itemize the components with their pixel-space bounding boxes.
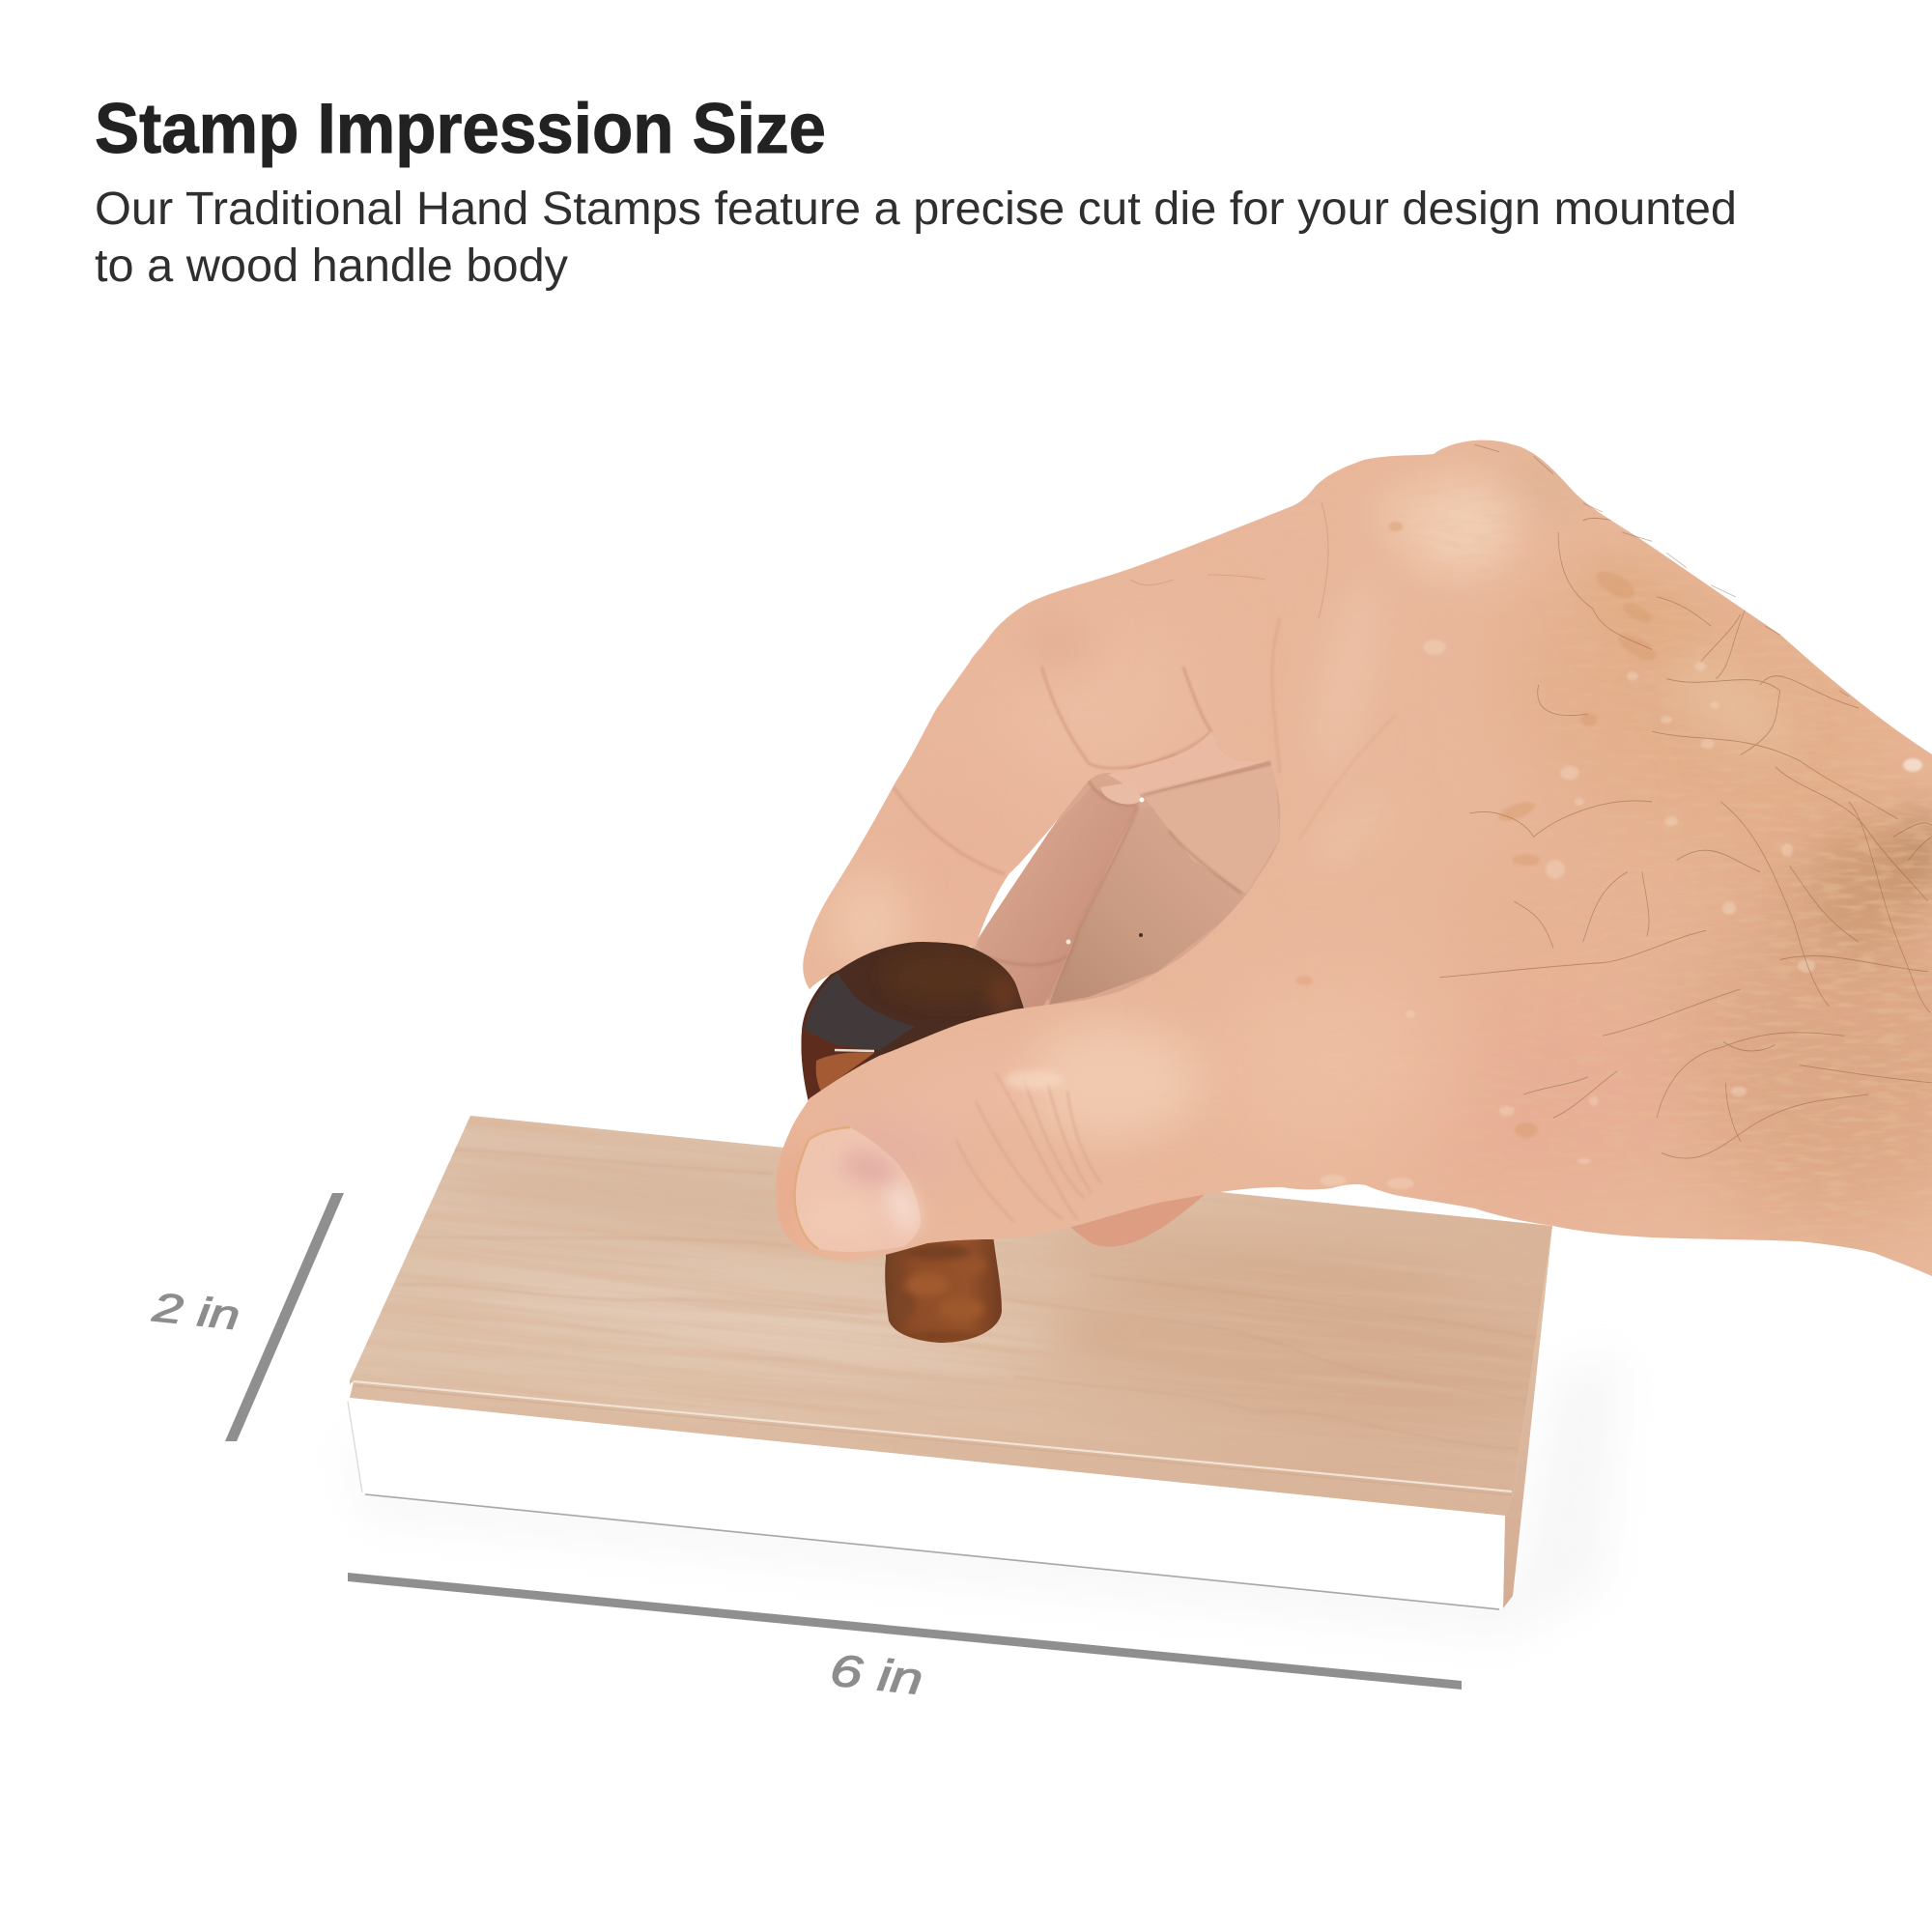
stamp handle knob: [802, 942, 1024, 1101]
thumb knuckle wrinkles: [956, 1072, 1101, 1222]
wood grain: [350, 1116, 1552, 1507]
front lip of wood: [350, 1383, 1135, 1478]
dimension line: 2 in: [225, 1193, 344, 1441]
clear plastic highlight line: [354, 1381, 1512, 1492]
skin texture: [1716, 798, 1932, 1276]
knob glare: [805, 973, 915, 1050]
title: Stamp Impression Size: [95, 90, 826, 168]
right side of wood block: [1503, 1226, 1552, 1608]
finger fold: [1108, 731, 1270, 795]
subtitle text block: [95, 184, 1737, 292]
fingers behind the knob: [972, 731, 1280, 1009]
skin shading: [854, 510, 1932, 1227]
index finger creases: [893, 620, 1281, 875]
hand upper-left fine lines: [1130, 502, 1328, 618]
dimension line: 6 in: [348, 1573, 1462, 1690]
knob left rim: [801, 995, 874, 1106]
dimension label: 2 in: 2 in: [150, 1284, 242, 1338]
tan age spots: [1295, 522, 1661, 1138]
wood top face: [350, 1116, 1552, 1516]
subtitle text block: to a wood handle body: [95, 241, 568, 292]
subtitle text block: Our Traditional Hand Stamps feature a precise cut die for your design mounted: [95, 184, 1737, 235]
stamp wood base: [350, 1116, 1552, 1608]
stamp handle shaft: [885, 1238, 1002, 1343]
soft shadow under stamp: [338, 1352, 1623, 1637]
ring finger: [1049, 829, 1221, 1005]
hand: [769, 425, 1932, 1294]
fine edge hairs: [1474, 444, 1849, 696]
finger tip below thumb: [1063, 1183, 1209, 1247]
middle finger: [978, 787, 1138, 1009]
arm hairs: [1440, 518, 1932, 1158]
palm fold: [1143, 765, 1280, 894]
thumb nail: [795, 1127, 924, 1252]
hand silhouette: [776, 440, 1932, 1276]
white die plate on front: [347, 1381, 1505, 1609]
dimension label: 6 in: 6 in: [828, 1644, 925, 1704]
pale skin spots: [1320, 639, 1922, 1189]
